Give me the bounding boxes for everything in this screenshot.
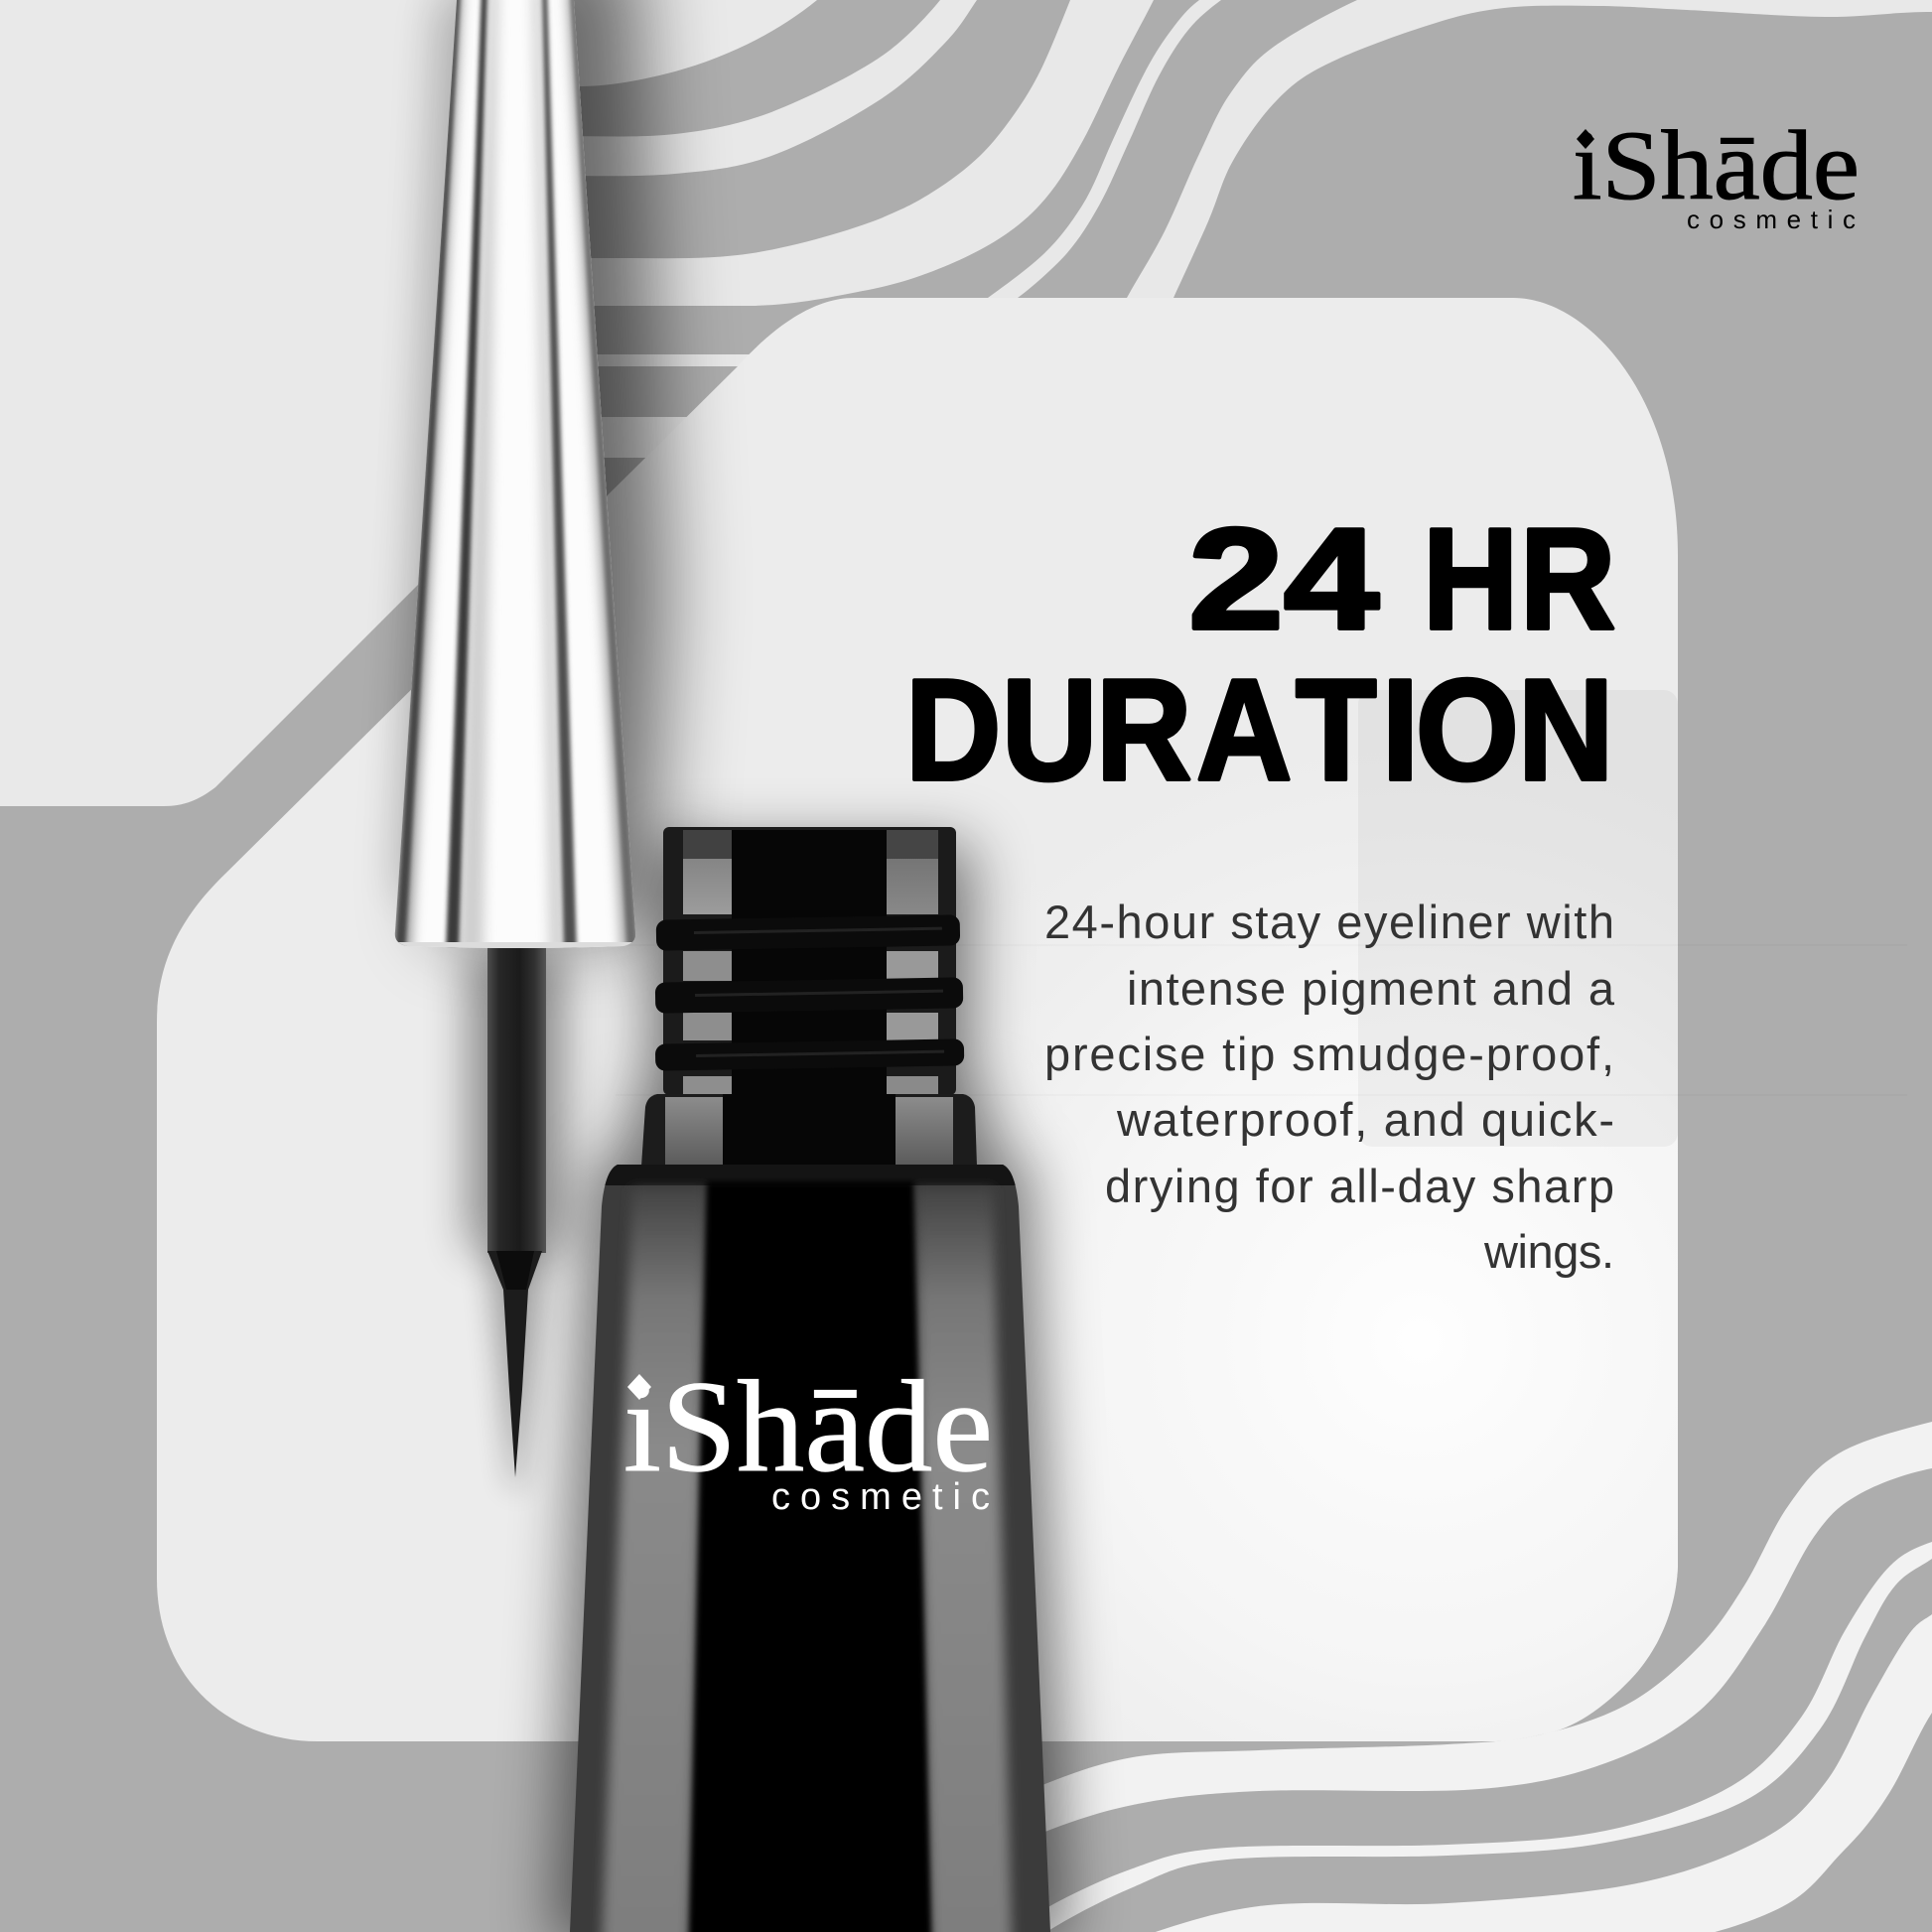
heading xyxy=(905,498,1615,810)
text block: description: 24-hour stay eyeliner with xyxy=(1044,896,1614,948)
panel: main rounded card xyxy=(157,298,1678,1741)
top wave bands xyxy=(556,0,1932,458)
icon: applicator stem xyxy=(487,943,546,1477)
text block: description: precise tip smudge-proof, xyxy=(1044,1028,1614,1080)
bottom wave bands xyxy=(1033,1422,1932,1932)
text block: description: wings. xyxy=(1483,1225,1614,1278)
text block: description: intense pigment and a xyxy=(1127,962,1615,1015)
bottle body xyxy=(556,1162,1062,1932)
bottle logo: cosmetic xyxy=(771,1476,990,1518)
bottle logo: iShāde xyxy=(623,1353,993,1499)
heading: HR xyxy=(1423,498,1615,659)
heading: DURATION xyxy=(905,649,1613,810)
card glow xyxy=(157,298,1678,1741)
logo: top right: cosmetic xyxy=(1687,205,1856,234)
icon: eyeliner bottle xyxy=(556,827,1062,1932)
bottle collar xyxy=(641,1094,977,1167)
shadow: bottle xyxy=(553,844,1067,1932)
bottle neck xyxy=(663,827,956,1098)
text block: description xyxy=(1044,896,1615,1278)
neck threads xyxy=(653,914,964,1071)
text block: description: drying for all-day sharp xyxy=(1105,1160,1614,1212)
panel: top-left light shape xyxy=(0,0,817,806)
heading: 24 xyxy=(1188,498,1379,659)
logo: top right: iShāde xyxy=(1573,110,1860,220)
translucent overlay block xyxy=(616,690,1907,1147)
icon: silver applicator cap xyxy=(395,0,635,948)
shadow: applicator cap xyxy=(402,0,667,931)
shadow: applicator stem xyxy=(469,951,564,1489)
text block: description: waterproof, and quick- xyxy=(1116,1093,1614,1146)
